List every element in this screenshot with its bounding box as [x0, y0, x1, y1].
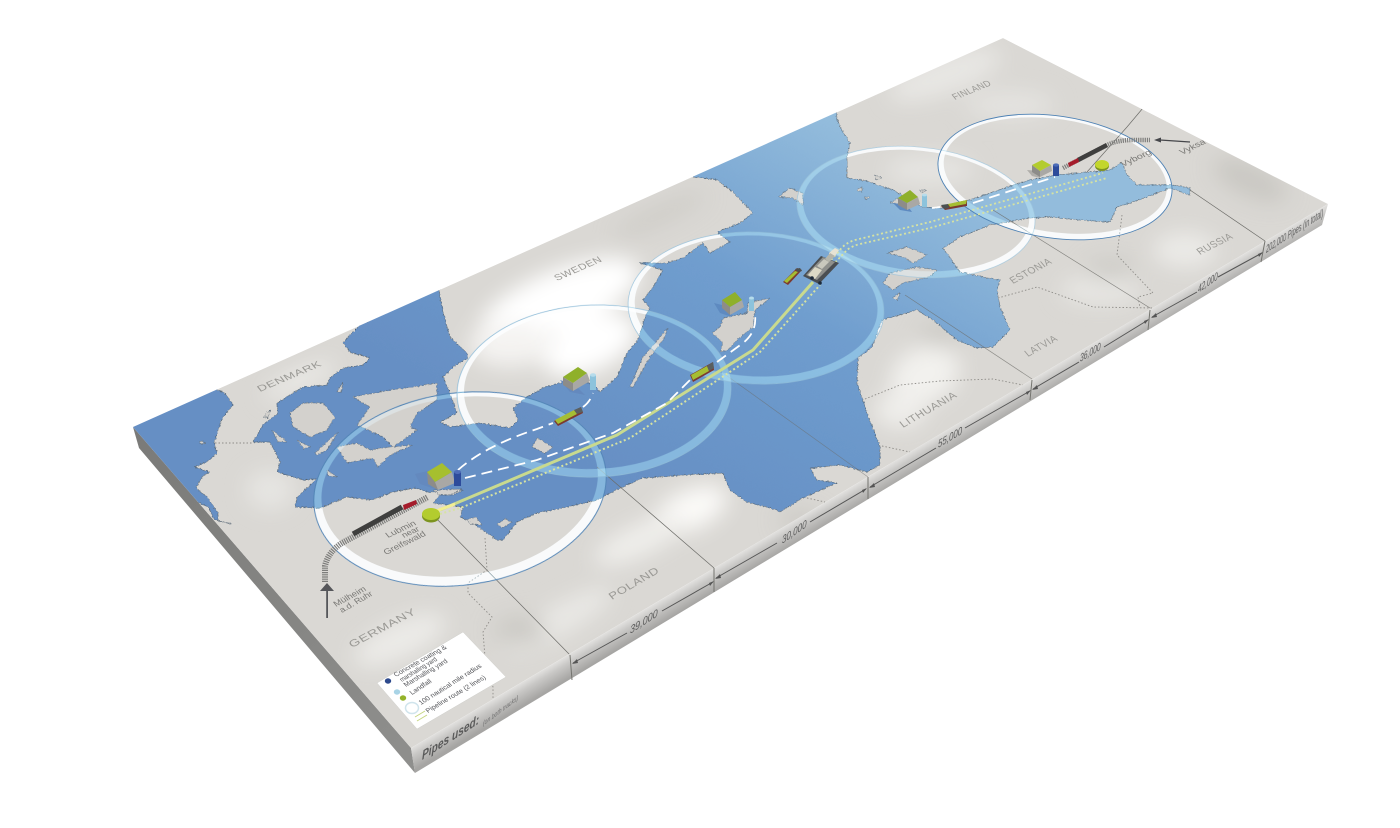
place labels: a.d. Ruhr [337, 589, 374, 614]
landfall: lubmin [422, 508, 440, 522]
quantity labels: 39,000 [630, 607, 658, 637]
islands [200, 175, 937, 528]
country labels: POLAND [607, 565, 662, 602]
ring 1 [313, 391, 607, 587]
ship near lay barge [783, 268, 802, 285]
langeland [315, 432, 338, 455]
place labels: Vyborg [1118, 148, 1153, 168]
place labels: Lubmin [383, 519, 418, 539]
legend swatch: landfall [400, 695, 406, 701]
nautical radius rings [301, 99, 1181, 605]
bornholm [532, 438, 553, 453]
radius ring highlights on land [301, 99, 1181, 605]
small danish islands [200, 382, 343, 477]
ship near kotka [941, 200, 967, 210]
country labels: SWEDEN [552, 255, 605, 283]
legend swatch: marshalling yard [394, 689, 400, 695]
marshalling yard: kotka [893, 190, 927, 212]
place labels: Vyksa [1177, 137, 1207, 156]
arrowheads [572, 252, 1263, 664]
quantity labels: 42,000 [1198, 270, 1218, 296]
legend labels: 100 nautical mile radius [417, 662, 483, 706]
legend labels [392, 643, 488, 714]
tracks note: (on both tracks) [483, 695, 518, 728]
legend labels: Landfall [408, 677, 434, 696]
northern pair two [826, 178, 1107, 272]
country labels: GERMANY [347, 607, 419, 650]
solid line [440, 282, 813, 510]
ring 2 [454, 300, 734, 482]
span arrows [573, 253, 1262, 663]
quantity labels: 202,000 Pipes (in total) [1265, 207, 1323, 256]
dotted national borders [215, 215, 1153, 698]
legend labels: Concrete coating & [392, 643, 449, 678]
sea [120, 105, 1190, 540]
small estonian island [893, 293, 900, 301]
quantity labels: 30,000 [782, 517, 807, 547]
funen [290, 403, 335, 437]
ship near karlskrona [554, 407, 583, 426]
dotted line [440, 285, 820, 514]
pipes used label: Pipes used: [422, 711, 479, 763]
ring 5 [929, 99, 1181, 255]
ring 3 [625, 226, 887, 390]
map surface [120, 38, 1328, 748]
legend labels: marshalling yard [398, 656, 439, 683]
gotland [712, 298, 770, 352]
legend swatch: pipeline [415, 711, 427, 721]
country labels: ESTONIA [1008, 256, 1054, 286]
aland [778, 188, 803, 205]
country and sector borders [431, 108, 1265, 655]
ring 4 [790, 135, 1042, 289]
quantity labels [630, 207, 1323, 637]
legend [377, 632, 506, 729]
country labels: FINLAND [950, 79, 994, 102]
arrow: from mulheim [320, 583, 334, 618]
landfall connection [436, 504, 455, 511]
legend labels: Marshalling yard [402, 657, 449, 688]
legend swatch: concrete coating yard [385, 678, 391, 684]
shipping routes [458, 177, 1055, 478]
oland [630, 328, 668, 387]
lolland and falster [337, 443, 413, 467]
train and track: lubmin [325, 497, 428, 582]
construction yard: vyborg [1027, 160, 1059, 178]
landfall: vyborg [1095, 160, 1109, 171]
train and track: vyborg [1063, 140, 1150, 168]
lay barge [803, 248, 839, 285]
hiiumaa [887, 247, 927, 263]
quantity labels: 36,000 [1080, 340, 1101, 365]
sector dividers [570, 241, 1265, 680]
place labels: Mülheim [331, 584, 368, 608]
country labels: LATVIA [1023, 333, 1060, 359]
saaremaa [883, 267, 937, 290]
construction yard: lubmin [415, 463, 461, 490]
legend labels: Pipeline route (2 lines) [424, 674, 488, 714]
legend swatch: radius ring [406, 702, 418, 714]
north sea [120, 388, 233, 524]
marshalling yard: karlskrona [560, 367, 596, 395]
arrow: from vyksa [1154, 138, 1190, 142]
quantity labels: 55,000 [938, 424, 963, 451]
place labels: Greifswald [381, 529, 428, 556]
marshalling yard: slite [714, 292, 754, 317]
ships [554, 200, 967, 426]
place labels [331, 137, 1207, 614]
northern pair one [822, 173, 1103, 270]
slab: base block [133, 204, 1328, 773]
side panel: pipe quantities [422, 207, 1323, 763]
polish islands [433, 489, 512, 528]
ship near slite [690, 362, 714, 382]
zealand [353, 383, 437, 447]
country labels: RUSSIA [1195, 231, 1236, 257]
country labels: DENMARK [255, 359, 325, 394]
land shading [246, 38, 1293, 677]
baltic sea and kattegat [253, 105, 1190, 540]
finnish archipelago [857, 175, 927, 204]
country labels: LITHUANIA [898, 390, 960, 430]
place labels: near [399, 524, 421, 539]
country labels [255, 79, 1236, 650]
pipeline route [436, 173, 1107, 514]
